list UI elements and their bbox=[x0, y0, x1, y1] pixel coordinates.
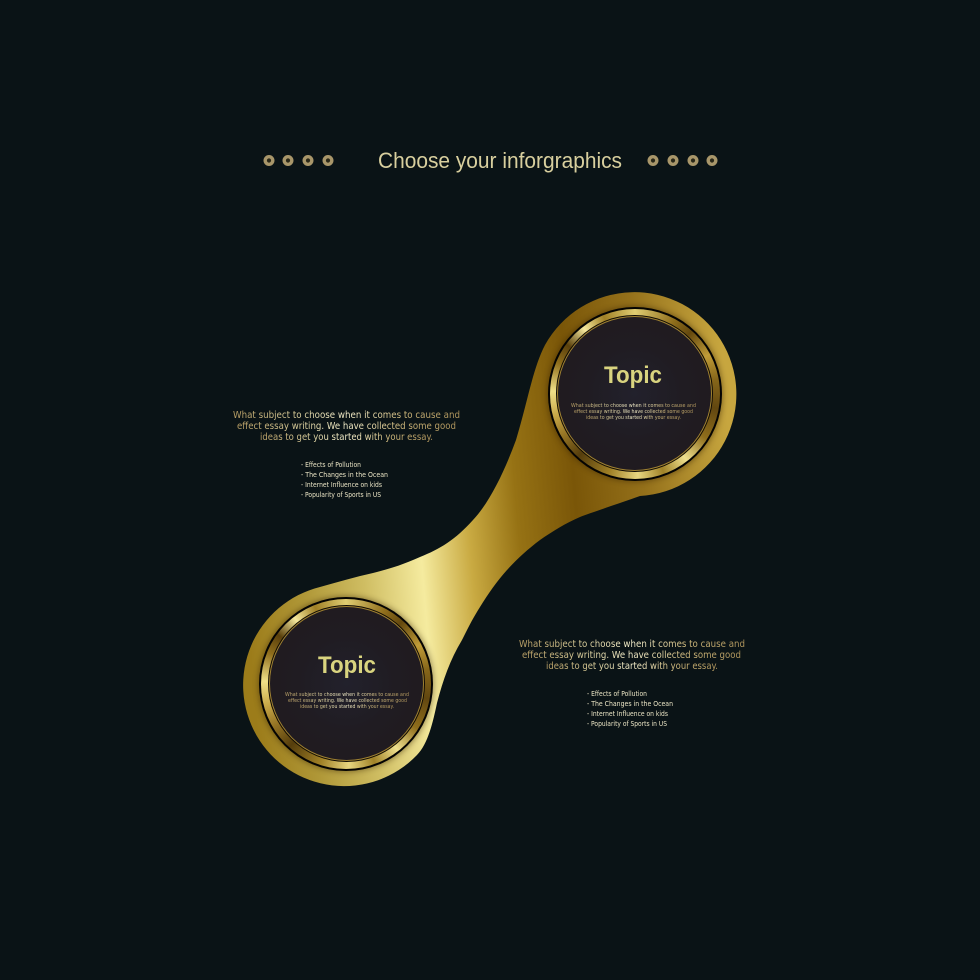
description: upper topic: ideas to get you started with your essay. bbox=[586, 415, 681, 421]
paragraph: right: effect essay writing. We have collected some good bbox=[522, 650, 741, 661]
paragraph: right: ideas to get you started with your essay. bbox=[546, 661, 718, 672]
description: upper topic: What subject to choose when it comes to cause and bbox=[571, 403, 696, 409]
list: left: - Popularity of Sports in US bbox=[301, 491, 381, 499]
description: upper topic: effect essay writing. We have collected some good bbox=[574, 409, 693, 415]
paragraph: right bbox=[519, 639, 745, 672]
right text block bbox=[519, 639, 745, 728]
list: right: - Effects of Pollution bbox=[587, 690, 647, 698]
upper circle text bbox=[571, 362, 696, 421]
list: left: - Internet Influence on kids bbox=[301, 481, 383, 489]
list: right bbox=[587, 690, 673, 728]
paragraph: right: What subject to choose when it comes to cause and bbox=[519, 639, 745, 650]
paragraph: left bbox=[233, 410, 460, 443]
paragraph: left: What subject to choose when it comes to cause and bbox=[233, 410, 460, 421]
topic circle: lower bbox=[259, 596, 433, 770]
list: left bbox=[301, 461, 388, 499]
decorative dots: left bbox=[265, 157, 332, 164]
description: lower topic bbox=[285, 692, 409, 710]
list: right: - Internet Influence on kids bbox=[587, 710, 669, 718]
list: left: - The Changes in the Ocean bbox=[301, 471, 388, 479]
paragraph: left: ideas to get you started with your essay. bbox=[260, 432, 433, 443]
list: left: - Effects of Pollution bbox=[301, 461, 361, 469]
list: right: - The Changes in the Ocean bbox=[587, 700, 673, 708]
description: lower topic: ideas to get you started with your essay. bbox=[300, 704, 394, 710]
paragraph: left: effect essay writing. We have collected some good bbox=[237, 421, 456, 432]
topic circle: upper bbox=[548, 306, 722, 480]
description: lower topic: What subject to choose when it comes to cause and bbox=[285, 692, 409, 698]
lower circle text bbox=[285, 652, 409, 710]
heading: upper topic: Topic bbox=[604, 362, 662, 389]
description: upper topic bbox=[571, 403, 696, 421]
left text block bbox=[233, 410, 460, 499]
description: lower topic: effect essay writing. We have collected some good bbox=[288, 698, 407, 704]
header bbox=[265, 148, 716, 173]
title: Choose your inforgraphics bbox=[378, 148, 622, 173]
list: right: - Popularity of Sports in US bbox=[587, 720, 667, 728]
gold connector shape bbox=[243, 292, 736, 786]
heading: lower topic: Topic bbox=[318, 652, 376, 679]
decorative dots: right bbox=[649, 157, 716, 164]
